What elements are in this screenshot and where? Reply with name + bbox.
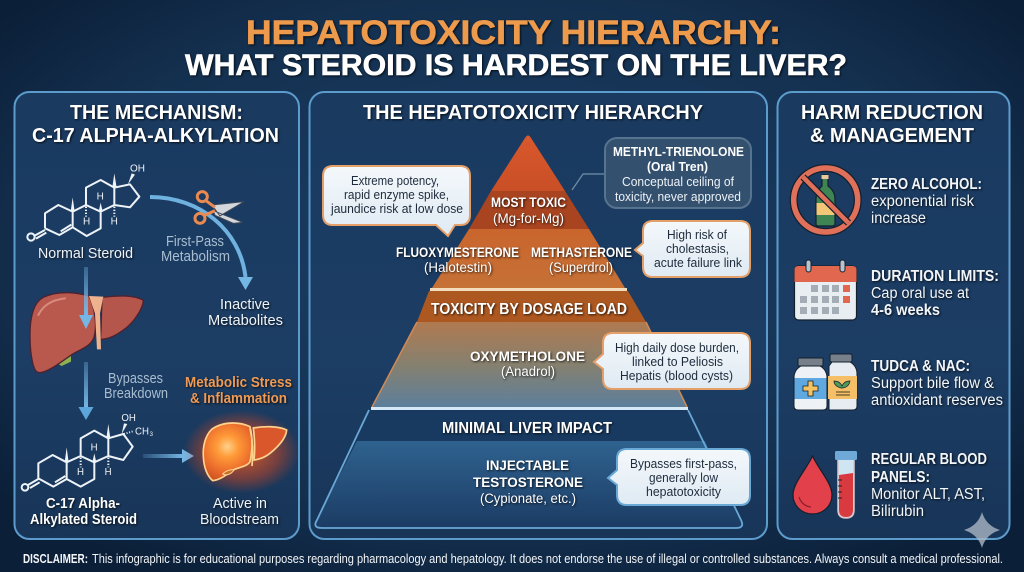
chart: toxicity pyramid (315, 136, 742, 528)
title (185, 14, 847, 82)
icon: normal steroid molecule: H (97, 191, 104, 202)
tier label: injectable testosterone: TESTOSTERONE (473, 474, 583, 490)
callout: methyl-trienolone: (Oral Tren) (647, 159, 708, 174)
text: tudca and nac (871, 358, 1003, 409)
text: zero alcohol: ZERO ALCOHOL: (871, 176, 982, 193)
icon: sparkle watermark (964, 512, 1000, 548)
tier label: injectable testosterone: (Cypionate, etc.) (480, 491, 576, 506)
tier label: most toxic: MOST TOXIC (491, 195, 566, 210)
heading: harm reduction (801, 102, 983, 147)
tier label: injectable testosterone: INJECTABLE (486, 457, 569, 473)
text: regular blood panels: PANELS: (871, 469, 930, 486)
tier label: methasterone: METHASTERONE (531, 245, 632, 260)
label: alkylated steroid (30, 496, 137, 528)
heading: harm reduction: & MANAGEMENT (810, 125, 974, 147)
icon: normal steroid molecule: H (83, 216, 90, 227)
icon: alkylated steroid molecule: CH (135, 426, 149, 437)
tier label: most toxic: (Mg-for-Mg) (493, 211, 564, 226)
callout: methyl-trienolone (572, 138, 751, 208)
icon: alkylated steroid molecule: H (105, 467, 112, 478)
panel: the mechanism (14, 92, 300, 539)
label: bypasses breakdown: Breakdown (104, 386, 168, 402)
title: HEPATOTOXICITY HIERARCHY: (246, 14, 781, 52)
panel: harm reduction (778, 92, 1010, 539)
arrow: into liver (79, 267, 93, 329)
callout: cholestasis: cholestasis, (666, 241, 729, 256)
callout: methyl-trienolone: METHYL-TRIENOLONE (613, 144, 744, 159)
text: duration limits: Cap oral use at (871, 285, 970, 302)
tier label: methasterone: (Superdrol) (549, 260, 613, 275)
text: duration limits: 4-6 weeks (871, 302, 940, 319)
label: first-pass metabolism: First-Pass (166, 234, 224, 250)
arrow: first-pass metabolism (150, 197, 253, 290)
callout: cholestasis: acute failure link (654, 255, 742, 270)
callout: bypasses first-pass: generally low (649, 470, 719, 485)
tier label: toxicity by dosage load: TOXICITY BY DOSAGE LOAD (431, 301, 627, 318)
icon: alkylated steroid molecule: 3 (150, 432, 154, 438)
callout: extreme potency: jaundice risk at low dose (330, 201, 463, 216)
callout: extreme potency: Extreme potency, (351, 173, 439, 188)
icon: inflamed liver (183, 410, 300, 493)
label: alkylated steroid: C-17 Alpha- (46, 496, 120, 512)
heading: mechanism (32, 102, 279, 147)
arrow: bypass breakdown (78, 362, 94, 420)
icon: alkylated steroid molecule: H (91, 443, 98, 454)
text: tudca and nac: TUDCA & NAC: (871, 358, 970, 375)
icon: no alcohol (794, 168, 858, 232)
label: inactive metabolites: Metabolites (208, 313, 283, 329)
callout: extreme potency (323, 166, 470, 236)
label: alkylated steroid: Alkylated Steroid (30, 512, 137, 528)
icon: alkylated steroid molecule: H (77, 467, 84, 478)
icon: blood drop and test tube (793, 451, 857, 518)
icon: normal steroid molecule: H (111, 216, 118, 227)
callout: peliosis hepatis: High daily dose burden, (615, 340, 739, 355)
tier label: fluoxymesterone (396, 245, 519, 275)
tier label: fluoxymesterone: (Halotestin) (424, 260, 492, 275)
tier label: minimal liver impact: MINIMAL LIVER IMPACT (442, 420, 613, 437)
label: normal steroid: Normal Steroid (38, 246, 133, 262)
icon: alkylated steroid molecule (22, 413, 154, 491)
callout: cholestasis: High risk of (667, 227, 727, 242)
tier label: oxymetholone: (Anadrol) (501, 364, 555, 379)
tier label: oxymetholone (470, 348, 585, 379)
icon: normal steroid molecule (27, 163, 145, 241)
callout: peliosis hepatis (594, 333, 750, 389)
callout: peliosis hepatis: linked to Peliosis (632, 354, 723, 369)
callout: methyl-trienolone: toxicity, never approved (615, 189, 741, 204)
label: first-pass metabolism (161, 234, 230, 265)
label: active in bloodstream (200, 496, 279, 528)
text: regular blood panels: Monitor ALT, AST, (871, 486, 985, 503)
heading: hierarchy: THE HEPATOTOXICITY HIERARCHY (363, 102, 704, 124)
text: zero alcohol (871, 176, 982, 227)
text: zero alcohol: increase (871, 210, 926, 227)
callout: cholestasis (635, 221, 750, 277)
icon: alkylated steroid molecule: OH (121, 413, 136, 424)
label: first-pass metabolism: Metabolism (161, 249, 230, 265)
icon: calendar (794, 260, 856, 320)
tier label: injectable testosterone (473, 457, 583, 506)
text: tudca and nac: Support bile flow & (871, 375, 995, 392)
text: zero alcohol: exponential risk (871, 193, 974, 210)
label: inactive metabolites (208, 297, 283, 329)
heading: harm reduction: HARM REDUCTION (801, 102, 983, 124)
callout: bypasses first-pass: Bypasses first-pass, (630, 456, 737, 471)
label: bypasses breakdown: Bypasses (108, 371, 163, 387)
disclaimer: DISCLAIMER: (23, 551, 88, 566)
label: active in bloodstream: Active in (213, 496, 267, 512)
heading: mechanism: THE MECHANISM: (70, 102, 243, 124)
panel: hierarchy (310, 92, 767, 539)
text: regular blood panels: REGULAR BLOOD (871, 451, 987, 468)
label: metabolic stress: Metabolic Stress (185, 375, 292, 391)
label: active in bloodstream: Bloodstream (200, 512, 279, 528)
text: tudca and nac: antioxidant reserves (871, 392, 1003, 409)
icon: scissors (195, 192, 244, 223)
label: inactive metabolites: Inactive (220, 297, 270, 313)
label: metabolic stress (185, 375, 292, 407)
tier label: methasterone (531, 245, 632, 275)
tier label: most toxic (491, 195, 566, 226)
text: regular blood panels (871, 451, 987, 520)
callout: methyl-trienolone: Conceptual ceiling of (622, 174, 734, 189)
callout: bypasses first-pass: hepatotoxicity (646, 484, 721, 499)
icon: normal steroid molecule: OH (130, 163, 145, 174)
callout: bypasses first-pass (608, 449, 750, 505)
text: duration limits: DURATION LIMITS: (871, 268, 999, 285)
icon: supplement bottles (794, 354, 857, 410)
text: regular blood panels: Bilirubin (871, 503, 924, 520)
heading: mechanism: C-17 ALPHA-ALKYLATION (32, 125, 279, 147)
arrow: to bloodstream (143, 449, 194, 463)
title: WHAT STEROID IS HARDEST ON THE LIVER? (185, 49, 847, 82)
tier label: oxymetholone: OXYMETHOLONE (470, 348, 585, 364)
callout: peliosis hepatis: Hepatis (blood cysts) (620, 368, 733, 383)
tier label: fluoxymesterone: FLUOXYMESTERONE (396, 245, 519, 260)
label: metabolic stress: & Inflammation (190, 391, 287, 407)
label: bypasses breakdown (104, 371, 168, 402)
callout: extreme potency: rapid enzyme spike, (344, 187, 449, 202)
text: duration limits (871, 268, 999, 319)
icon: healthy liver (30, 293, 143, 373)
